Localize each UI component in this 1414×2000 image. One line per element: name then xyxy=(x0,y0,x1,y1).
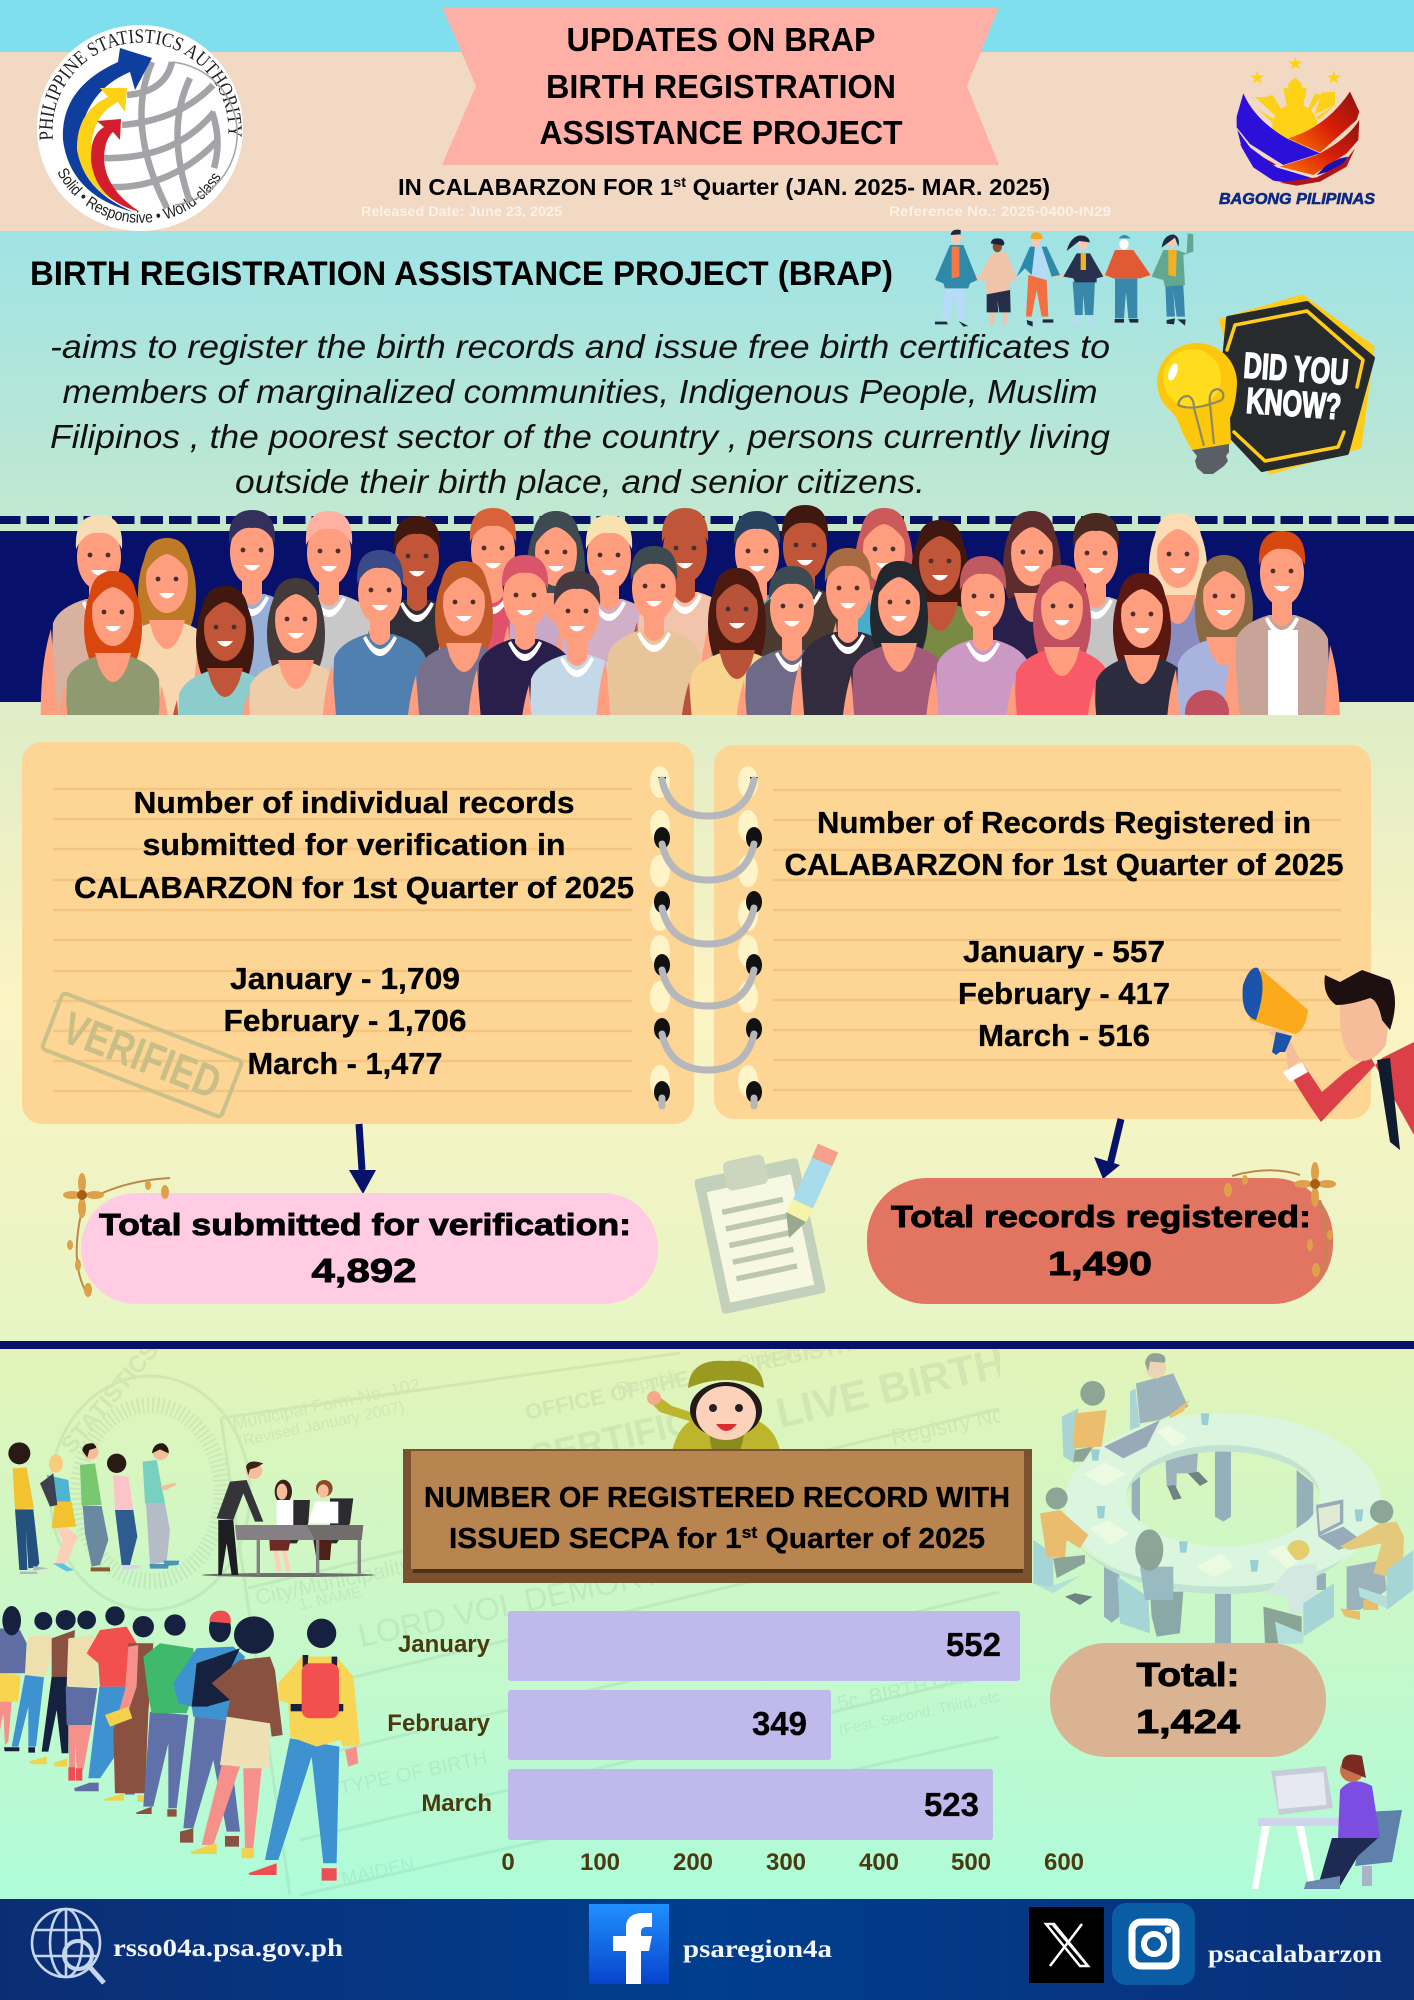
title banner xyxy=(442,7,999,165)
person 2 xyxy=(978,238,1017,325)
person 5 xyxy=(74,1606,137,1795)
PSA logo xyxy=(37,25,243,231)
cork board heading: Quarter of 2025 xyxy=(757,1523,985,1555)
woman two xyxy=(308,1480,353,1560)
panel: individual records submitted xyxy=(22,742,694,1124)
value axis xyxy=(501,1849,1084,1876)
woman lower left xyxy=(1033,1487,1093,1605)
icon: man with megaphone xyxy=(1243,968,1414,1150)
total submitted pill: 4,892 xyxy=(312,1252,416,1289)
big queue of people xyxy=(0,1606,360,1881)
person 3 xyxy=(1017,232,1060,327)
icon: instagram xyxy=(1112,1903,1195,1985)
title banner: BIRTH REGISTRATION xyxy=(546,68,896,105)
total pill xyxy=(1050,1643,1326,1757)
blond man xyxy=(1263,1540,1334,1643)
woman centre xyxy=(1117,1529,1183,1637)
certificate texture: STATISTICS xyxy=(56,1337,164,1459)
logo caption: BAGONG PILIPINAS xyxy=(1219,191,1376,208)
released date: Released Date: June 23, 2025 xyxy=(361,204,563,219)
meeting table illustration xyxy=(1033,1353,1413,1643)
person 3 xyxy=(28,1610,76,1767)
certificate texture: (Fest, Second, Third, etc.) xyxy=(837,1686,1010,1739)
table legs xyxy=(1104,1451,1326,1643)
standing man xyxy=(1130,1353,1208,1500)
PSA logo: Solid • Responsive • World-class xyxy=(58,168,220,223)
description paragraph: members of marginalized communities, Indigenous People, Muslim xyxy=(62,373,1098,410)
light bulb xyxy=(1157,343,1237,474)
table ring xyxy=(1065,1413,1382,1592)
monthly values: February - 1,706 xyxy=(224,1003,466,1038)
subtitle: Quarter (JAN. 2025- MAR. 2025) xyxy=(686,174,1050,200)
monthly values xyxy=(958,934,1170,1053)
value axis: 600 xyxy=(1044,1849,1084,1876)
icon: office desk scene xyxy=(202,1461,375,1577)
bar values: 349 xyxy=(752,1705,807,1742)
total registered pill: Total records registered: xyxy=(891,1199,1311,1234)
panel heading: Number of Records Registered in xyxy=(817,805,1311,840)
instagram handle: psacalabarzon xyxy=(1208,1941,1382,1968)
person 2 xyxy=(40,1454,78,1572)
person 10 xyxy=(248,1619,360,1881)
dashed divider xyxy=(0,520,1414,531)
panel: records registered xyxy=(714,745,1371,1119)
description paragraph xyxy=(50,328,1111,500)
monthly values: January - 557 xyxy=(963,934,1165,969)
person 1 xyxy=(0,1606,27,1745)
bar chart xyxy=(387,1611,1084,1876)
certificate texture: 5c. BIRTH ORDER xyxy=(835,1658,1006,1715)
floral decoration xyxy=(63,1173,170,1297)
certificate texture: 1. NAME xyxy=(297,1584,363,1614)
total pill: Total: xyxy=(1136,1656,1240,1693)
panel heading: CALABARZON for 1st Quarter of 2025 xyxy=(784,847,1344,882)
description paragraph: Filipinos , the poorest sector of the country , persons currently living xyxy=(50,418,1111,455)
bar values: 523 xyxy=(924,1786,979,1823)
certificate texture: CERTIFICATE xyxy=(525,1385,763,1478)
panel heading xyxy=(784,805,1344,882)
value axis: 0 xyxy=(501,1849,515,1876)
monthly values: March - 516 xyxy=(978,1018,1150,1053)
stars xyxy=(1249,53,1342,87)
stars: ★ xyxy=(1249,67,1265,87)
total registered pill: 1,490 xyxy=(1048,1245,1152,1282)
value axis: 500 xyxy=(951,1849,991,1876)
man with laptop right xyxy=(1316,1499,1413,1620)
standing man xyxy=(217,1461,263,1575)
value axis: 200 xyxy=(673,1849,713,1876)
reference number: Reference No.: 2025-0400-IN29 xyxy=(889,204,1111,219)
certificate texture: MAIDEN xyxy=(340,1854,416,1890)
icon: person at computer xyxy=(1252,1754,1402,1889)
monthly values: January - 1,709 xyxy=(230,961,460,996)
cork board heading: NUMBER OF REGISTERED RECORD WITH xyxy=(424,1482,1010,1514)
person 9 xyxy=(191,1616,283,1858)
certificate texture: City/Municipality xyxy=(253,1552,414,1610)
notebook spiral rings xyxy=(650,766,762,1106)
title banner: UPDATES ON BRAP xyxy=(566,21,876,58)
cork board heading: st xyxy=(742,1523,758,1542)
icon: clipboard xyxy=(692,1147,828,1315)
footer xyxy=(0,1899,1414,2000)
category labels xyxy=(387,1631,492,1817)
panel heading: submitted for verification in xyxy=(142,827,566,862)
stars: ★ xyxy=(1287,53,1303,73)
did you know text xyxy=(1240,344,1350,428)
pencil xyxy=(786,1148,828,1238)
certificate texture: Republic of the Philippines xyxy=(615,1335,826,1399)
icon: did you know xyxy=(1157,296,1373,474)
person 1 xyxy=(935,230,977,327)
certificate texture: Municipal Form No. 102 xyxy=(231,1375,422,1434)
blue and red bands xyxy=(1288,92,1359,153)
heading: BIRTH REGISTRATION ASSISTANCE PROJECT (BRAP) xyxy=(30,255,893,293)
icon: globe with magnifier xyxy=(32,1909,104,1983)
certificate texture xyxy=(50,1301,1010,1895)
header band xyxy=(0,0,1414,231)
description paragraph: -aims to register the birth records and issue free birth certificates to xyxy=(50,328,1110,365)
person 4 xyxy=(1063,235,1103,324)
woman one xyxy=(269,1480,310,1572)
person 5 xyxy=(1105,235,1151,323)
certificate texture: LIVE BIRTH xyxy=(771,1338,1009,1437)
Bagong Pilipinas logo xyxy=(1219,53,1376,208)
value axis: 400 xyxy=(859,1849,899,1876)
category labels: February xyxy=(387,1710,491,1737)
subtitle: IN CALABARZON FOR 1 xyxy=(398,174,664,200)
panel heading: CALABARZON for 1st Quarter of 2025 xyxy=(74,870,634,905)
monthly values xyxy=(224,961,466,1081)
total registered pill xyxy=(867,1162,1336,1304)
stars: ★ xyxy=(1326,67,1342,87)
certificate texture: TYPE OF BIRTH xyxy=(337,1747,490,1800)
arrow: registered to total xyxy=(1094,1119,1121,1179)
small queue of people xyxy=(8,1442,179,1574)
website: rsso04a.psa.gov.ph xyxy=(113,1935,343,1962)
front row xyxy=(58,531,1340,715)
total submitted pill: Total submitted for verification: xyxy=(99,1207,631,1242)
person 5 xyxy=(143,1443,179,1569)
subtitle: st xyxy=(673,174,686,190)
child mascot xyxy=(647,1361,780,1451)
person 4 xyxy=(66,1611,98,1781)
six people holding hands xyxy=(935,230,1193,327)
person 8 xyxy=(173,1611,245,1847)
total pill: 1,424 xyxy=(1136,1703,1241,1740)
icon: facebook xyxy=(589,1904,669,1984)
description paragraph: outside their birth place, and senior citizens. xyxy=(235,463,925,500)
value axis: 100 xyxy=(580,1849,620,1876)
bar values: 552 xyxy=(946,1626,1001,1663)
panel heading xyxy=(74,785,634,905)
bars xyxy=(508,1611,1020,1840)
person 7 xyxy=(136,1614,197,1817)
category labels: January xyxy=(398,1631,491,1658)
cups and papers xyxy=(1083,1413,1363,1577)
did you know text: DID YOU xyxy=(1242,344,1350,393)
did you know text: KNOW? xyxy=(1245,380,1343,427)
monthly values: February - 417 xyxy=(958,976,1170,1011)
person 1 xyxy=(8,1442,49,1574)
sun xyxy=(1255,78,1335,149)
person 2 xyxy=(4,1612,55,1753)
verified stamp: VERIFIED xyxy=(56,1001,228,1109)
person 6 xyxy=(1152,233,1193,326)
certificate texture: Registry No xyxy=(889,1402,1006,1450)
desk xyxy=(235,1525,363,1575)
facebook handle: psaregion4a xyxy=(683,1936,833,1963)
person 6 xyxy=(103,1616,154,1802)
certificate texture: OFFICE OF THE CIVIL REGISTRAR GENERAL xyxy=(523,1301,996,1425)
title banner: ASSISTANCE PROJECT xyxy=(540,114,902,151)
person 4 xyxy=(107,1454,141,1570)
value axis: 300 xyxy=(766,1849,806,1876)
person 3 xyxy=(80,1443,110,1571)
panel heading: Number of individual records xyxy=(134,785,574,820)
arrow: submitted to total xyxy=(349,1124,376,1194)
bar values xyxy=(752,1626,1001,1823)
total submitted pill xyxy=(63,1173,658,1304)
certificate texture: (Revised January 2007) xyxy=(236,1399,406,1451)
certificate texture: LORD VOL DEMORT xyxy=(355,1555,663,1654)
crowd panel xyxy=(0,505,1414,715)
icon: x xyxy=(1029,1907,1104,1983)
woman with laptop xyxy=(1062,1381,1160,1463)
section divider xyxy=(0,1341,1414,1349)
PSA logo: PHILIPPINE STATISTICS AUTHORITY xyxy=(39,29,242,140)
cork board heading: ISSUED SECPA for 1 xyxy=(449,1523,733,1555)
back row xyxy=(40,505,1207,715)
floral decoration xyxy=(1224,1162,1336,1277)
category labels: March xyxy=(421,1790,492,1817)
cork board heading xyxy=(403,1449,1032,1583)
monthly values: March - 1,477 xyxy=(248,1046,442,1081)
